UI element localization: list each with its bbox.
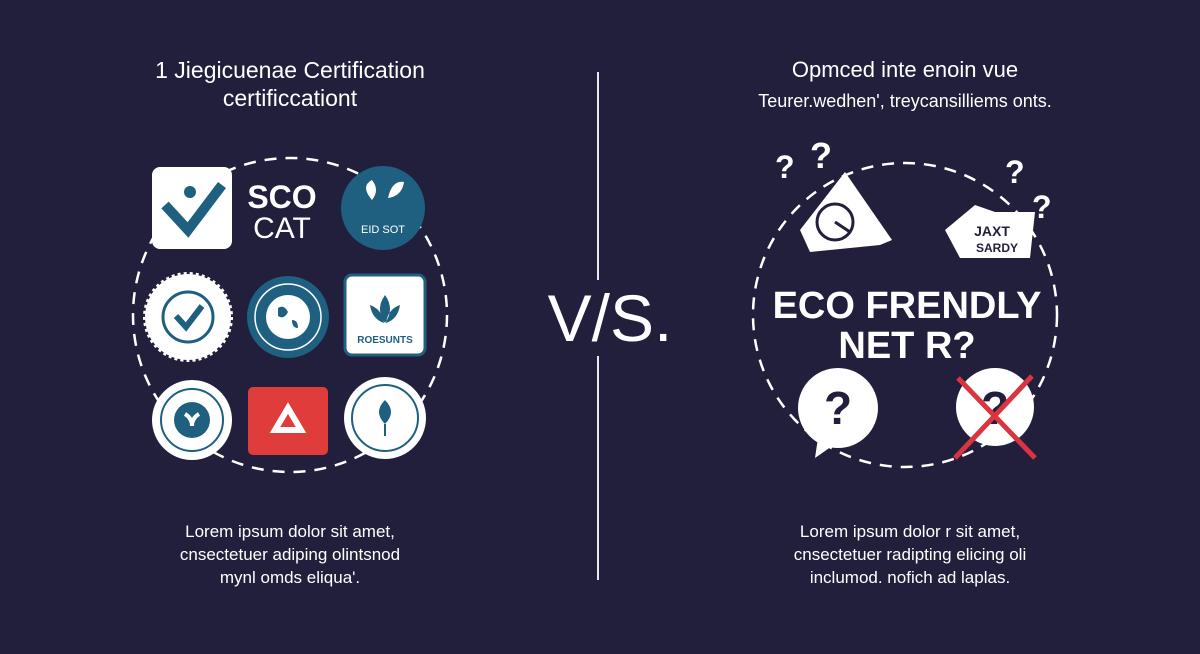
icon: JAXT SARDY tag bbox=[945, 205, 1035, 258]
right title: Opmced inte enoin vue bbox=[792, 57, 1018, 82]
icon: SCO CAT text logo bbox=[247, 179, 317, 245]
icon: ROESUNTS square bbox=[345, 275, 425, 355]
heading: ECO FRENDLY NET R?: NET R? bbox=[838, 325, 976, 367]
icon: EID SOT badge: EID SOT bbox=[361, 224, 405, 236]
icon: question marks: ? bbox=[1005, 154, 1025, 190]
left title: certificcationt bbox=[223, 85, 357, 111]
right description: inclumod. nofich ad laplas. bbox=[810, 568, 1010, 587]
heading: ECO FRENDLY NET R?: ECO FRENDLY bbox=[773, 285, 1041, 327]
right description: cnsectetuer radipting elicing oli bbox=[794, 545, 1026, 564]
right panel: greenwashing questions bbox=[752, 135, 1058, 468]
left description: cnsectetuer adiping olintsnod bbox=[180, 545, 400, 564]
icon: question marks bbox=[775, 135, 1052, 225]
left title: 1 Jiegicuenae Certification bbox=[155, 57, 425, 83]
left description: Lorem ipsum dolor sit amet, bbox=[185, 522, 395, 541]
icon: leaf stamp bbox=[344, 377, 426, 459]
left description bbox=[180, 522, 400, 587]
icon: crossed question bbox=[955, 368, 1035, 458]
icon: JAXT SARDY tag: SARDY bbox=[976, 241, 1018, 255]
icon: question marks: ? bbox=[810, 135, 832, 176]
left description: mynl omds eliqua'. bbox=[220, 568, 360, 587]
icon: SCO CAT text logo: CAT bbox=[253, 212, 311, 245]
icon: crossed question: ? bbox=[981, 382, 1009, 434]
icon: seal with check bbox=[145, 274, 231, 360]
icon: check square bbox=[152, 167, 232, 249]
left title bbox=[155, 57, 425, 111]
icon: JAXT SARDY tag: JAXT bbox=[974, 223, 1010, 239]
icon: torn triangle sign bbox=[800, 172, 892, 252]
right description: Lorem ipsum dolor r sit amet, bbox=[800, 522, 1020, 541]
icon: ROESUNTS square: ROESUNTS bbox=[357, 335, 413, 346]
icon: SCO CAT text logo: SCO bbox=[247, 179, 317, 215]
icon: speech bubble question bbox=[798, 368, 878, 458]
icon: EID SOT badge bbox=[341, 166, 425, 250]
icon: question marks: ? bbox=[1032, 189, 1052, 225]
icon: leaf round badge bbox=[152, 380, 232, 460]
right title bbox=[758, 57, 1052, 111]
icon: globe badge bbox=[247, 276, 329, 358]
right description bbox=[794, 522, 1026, 587]
left panel: certification badges bbox=[132, 156, 448, 474]
divider bbox=[597, 72, 599, 580]
icon: recycle red square bbox=[248, 387, 328, 455]
VS label: V/S. bbox=[548, 281, 672, 355]
heading: ECO FRENDLY NET R? bbox=[773, 285, 1041, 367]
right title: Teurer.wedhen', treycansilliems onts. bbox=[758, 91, 1052, 111]
icon: question marks: ? bbox=[775, 149, 795, 185]
icon: speech bubble question: ? bbox=[824, 382, 852, 434]
